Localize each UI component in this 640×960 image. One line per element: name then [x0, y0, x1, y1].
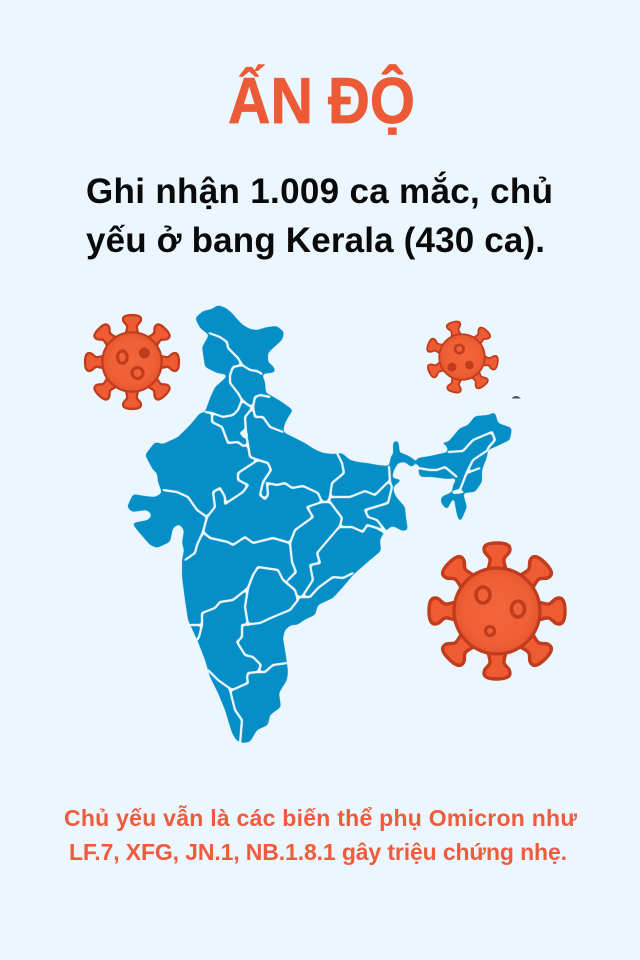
map: state borders — [163, 333, 495, 744]
icon: virus top right — [426, 320, 499, 394]
title: ẤN — [228, 64, 313, 138]
footer text: Chủ yếu vẫn là các biến thể phụ Omicron như — [64, 804, 577, 831]
title — [228, 64, 415, 138]
icon: virus top left — [85, 315, 179, 409]
map of India — [127, 305, 512, 744]
footer text — [64, 804, 577, 865]
icon: virus large — [429, 543, 565, 679]
title: ĐỘ — [328, 64, 415, 138]
footer text: LF.7, XFG, JN.1, NB.1.8.1 gây triệu chứng nhẹ. — [69, 839, 567, 865]
icon: small dark mark — [512, 396, 521, 398]
heading text — [86, 171, 553, 260]
heading text: yếu ở bang Kerala (430 ca). — [86, 221, 545, 260]
heading text: Ghi nhận 1.009 ca mắc, chủ — [86, 171, 553, 211]
map: landmass — [127, 305, 512, 743]
